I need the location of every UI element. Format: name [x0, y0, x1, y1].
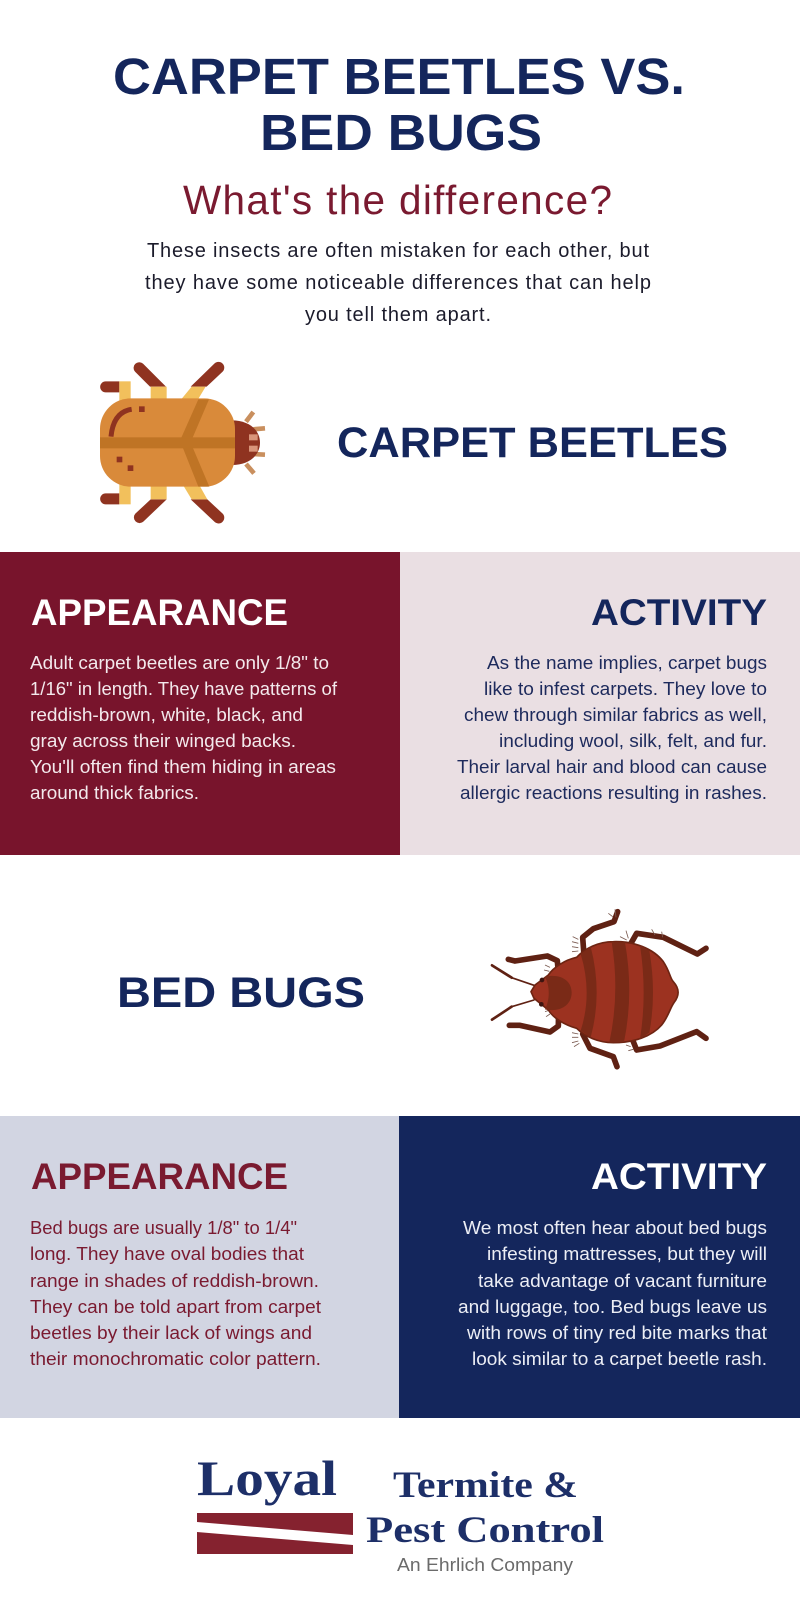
legs	[508, 912, 706, 1067]
logo: Pest Control	[366, 1510, 604, 1551]
text block: like to infest carpets. They love to	[484, 679, 767, 699]
text block	[30, 1218, 321, 1369]
text block: reddish-brown, white, black, and	[30, 705, 303, 725]
legs	[100, 362, 224, 523]
text block: Adult carpet beetles are only 1/8" to	[30, 653, 329, 673]
subtitle: What's the difference?	[183, 177, 612, 223]
text block: long. They have oval bodies that	[30, 1244, 304, 1264]
text block: infesting mattresses, but they will	[487, 1244, 767, 1264]
text block: We most often hear about bed bugs	[463, 1218, 767, 1238]
text block	[30, 653, 338, 803]
text block	[457, 653, 767, 803]
panel: bed bug activity	[399, 1116, 800, 1418]
heading: bed bugs: BED BUGS	[117, 969, 365, 1017]
title: CARPET BEETLES VS.	[113, 48, 685, 105]
icon: carpet beetle	[100, 362, 265, 523]
text block: allergic reactions resulting in rashes.	[460, 783, 767, 803]
logo	[197, 1450, 604, 1575]
logo: Loyal	[197, 1450, 337, 1506]
intro text	[145, 240, 651, 326]
heading: activity: ACTIVITY	[591, 592, 767, 633]
heading: carpet beetles: CARPET BEETLES	[337, 419, 728, 467]
panel: bed bug appearance	[0, 1116, 399, 1418]
intro text: they have some noticeable differences that can help	[145, 272, 651, 294]
text block: chew through similar fabrics as well,	[464, 705, 767, 725]
intro text: you tell them apart.	[305, 304, 491, 326]
text block: 1/16" in length. They have patterns of	[30, 679, 338, 699]
antennae	[246, 412, 265, 473]
text block: Bed bugs are usually 1/8" to 1/4"	[30, 1218, 297, 1238]
title	[113, 48, 685, 161]
panel: carpet beetle appearance	[0, 552, 400, 855]
text block: range in shades of reddish-brown.	[30, 1271, 319, 1291]
icon: bed bug	[492, 909, 706, 1067]
stripes	[545, 942, 653, 1042]
heading: activity: ACTIVITY	[591, 1156, 767, 1197]
text block: with rows of tiny red bite marks that	[466, 1323, 767, 1343]
antennae	[492, 965, 534, 1020]
text block: You'll often find them hiding in areas	[30, 757, 336, 777]
text block: gray across their winged backs.	[30, 731, 296, 751]
logo: Termite &	[393, 1465, 578, 1506]
text block: Their larval hair and blood can cause	[457, 757, 767, 777]
text block: They can be told apart from carpet	[30, 1297, 321, 1317]
logo: An Ehrlich Company	[397, 1555, 573, 1575]
body	[531, 942, 678, 1043]
title: BED BUGS	[260, 104, 542, 161]
heading: appearance: APPEARANCE	[31, 592, 288, 633]
text block: around thick fabrics.	[30, 783, 199, 803]
text block	[458, 1218, 767, 1369]
text block: beetles by their lack of wings and	[30, 1323, 312, 1343]
text block: and luggage, too. Bed bugs leave us	[458, 1297, 767, 1317]
intro text: These insects are often mistaken for each other, but	[147, 240, 649, 262]
text block: As the name implies, carpet bugs	[487, 653, 767, 673]
text block: look similar to a carpet beetle rash.	[472, 1349, 767, 1369]
heading: appearance: APPEARANCE	[31, 1156, 288, 1197]
text block: their monochromatic color pattern.	[30, 1349, 321, 1369]
logo bars	[197, 1513, 353, 1554]
text block: including wool, silk, felt, and fur.	[499, 731, 767, 751]
text block: take advantage of vacant furniture	[478, 1271, 767, 1291]
panel: carpet beetle activity	[400, 552, 800, 855]
